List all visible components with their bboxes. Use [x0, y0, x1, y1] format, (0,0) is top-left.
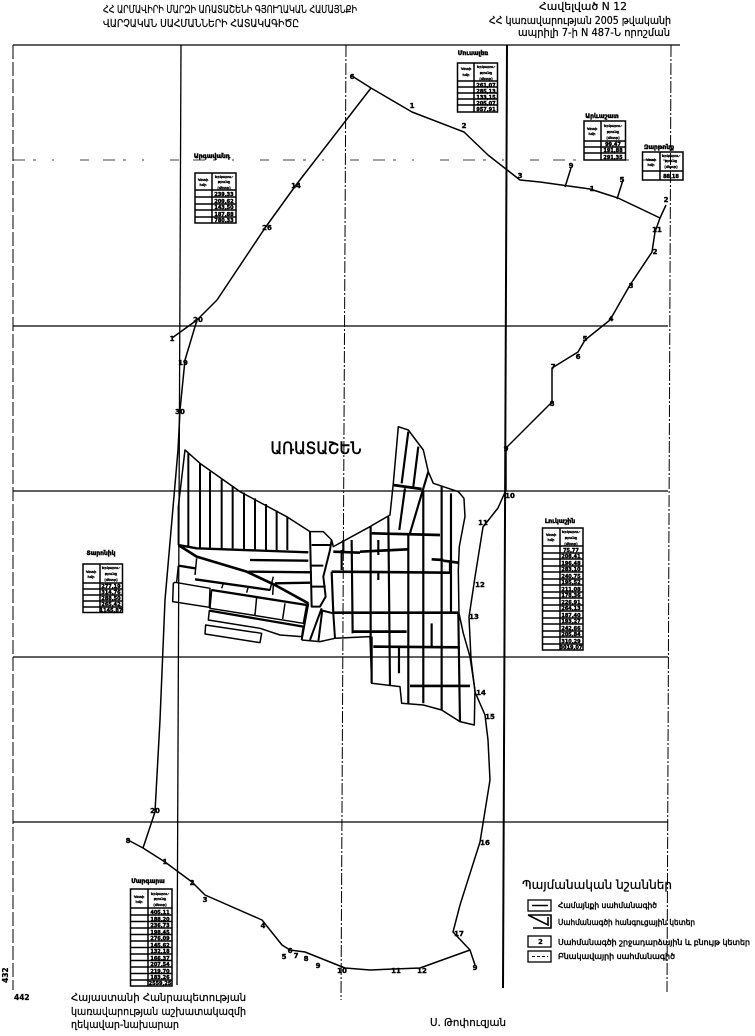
- table: east: 226,91: [561, 600, 581, 606]
- table: north east: Երկարու-: [604, 124, 623, 128]
- table: west: հմր: [88, 575, 95, 579]
- table: west: [83, 550, 123, 614]
- table: east: (մետր): [564, 542, 578, 546]
- settlement plan: [173, 427, 475, 725]
- table: north: 205,07: [476, 101, 496, 107]
- table: far north east: Երկարու-: [662, 154, 681, 158]
- table: east: Լուկաշին: [545, 518, 575, 525]
- minister signature block: կառավարության աշխատակազմի: [71, 1006, 246, 1018]
- table: west: 288,50: [101, 596, 121, 602]
- table: east: 205,84: [561, 632, 581, 638]
- legend title: Պայմանական նշաններ: [522, 877, 672, 892]
- boundary point labels: 1: [410, 102, 415, 110]
- table: east: 178,36: [561, 593, 581, 599]
- table: north west: 187,88: [214, 212, 234, 218]
- table: south west: 405,11: [150, 910, 170, 916]
- boundary point labels: 1: [170, 335, 175, 343]
- table: north west: (մետր): [217, 186, 231, 190]
- table: east: 193,27: [561, 619, 581, 625]
- boundary point labels: 13: [469, 613, 479, 621]
- table: south west: թյունը: [154, 897, 167, 901]
- table: west: 314,76: [101, 590, 121, 596]
- table: north east: [584, 113, 626, 161]
- boundary point labels: 6: [288, 947, 293, 955]
- table: west: (մետր): [104, 578, 118, 582]
- table: north east: Արևաշատ: [585, 113, 619, 120]
- boundary point labels: 2: [653, 248, 658, 256]
- table: far north east: (մետր): [664, 165, 678, 169]
- central blocks: [302, 532, 335, 642]
- boundary point labels: 1: [590, 185, 595, 193]
- minister signature block: ղեկավար-նախարար: [71, 1019, 179, 1031]
- boundary point labels: 12: [417, 967, 427, 975]
- boundary point labels: 4: [261, 922, 266, 930]
- annex note: Հավելված N 12: [539, 1, 627, 13]
- settlement outline: [178, 427, 475, 725]
- table: east: 196,48: [561, 561, 581, 567]
- table: north: 133,15: [476, 95, 496, 101]
- table: north east: հմր: [589, 132, 596, 136]
- boundary point labels: 14: [476, 689, 486, 697]
- table: east: 310,29: [561, 639, 581, 645]
- boundary point labels: 26: [262, 224, 272, 232]
- table: north: հմր: [463, 73, 470, 77]
- table: east: 283,10: [561, 567, 581, 573]
- table: north east: 99,47: [605, 142, 621, 148]
- boundary point labels: 9: [316, 962, 321, 970]
- table: east: 75,77: [563, 548, 579, 554]
- boundary point labels: 3: [518, 172, 523, 180]
- table: north: 957,91: [476, 107, 496, 113]
- table: west: 277,19: [101, 584, 121, 590]
- boundary point labels: 5: [620, 176, 625, 184]
- table: north west: 780,33: [214, 218, 234, 224]
- boundary point labels: 15: [485, 713, 495, 721]
- table: north: [457, 50, 498, 113]
- table: east: Կետի: [546, 533, 557, 537]
- table: east: 3019,07: [560, 645, 583, 651]
- boundary point labels: 2: [190, 879, 195, 887]
- table: north east: Կետի: [587, 127, 598, 131]
- table: south west: 198,45: [150, 930, 170, 936]
- table: north west: 143,50: [214, 205, 234, 211]
- table: south west: հմր: [136, 900, 143, 904]
- boundary point labels: 9: [569, 162, 574, 170]
- table: east: [542, 518, 583, 651]
- community boundary line: [128, 76, 666, 970]
- boundary point labels: 7: [551, 363, 556, 371]
- table: north west: [194, 153, 236, 224]
- table: south west: (մետր): [153, 903, 167, 907]
- boundary point labels: 20: [193, 316, 203, 324]
- table: north: Երկարու-: [477, 65, 496, 69]
- table: south west: 145,62: [150, 943, 170, 949]
- table: far north east: 88,18: [663, 174, 679, 180]
- table: east: 242,66: [561, 626, 581, 632]
- table: north: 285,13: [476, 89, 496, 95]
- table: north west: թյունը: [218, 180, 231, 184]
- boundary point labels: 8: [550, 400, 555, 408]
- table: east: հմր: [548, 538, 555, 542]
- table: south west: 132,18: [150, 949, 170, 955]
- table: west: Կետի: [86, 570, 97, 574]
- table: far north east: [642, 144, 683, 180]
- boundary point labels: 14: [291, 182, 301, 190]
- boundary point labels: 7: [294, 952, 299, 960]
- table: north: (մետր): [479, 77, 493, 81]
- annex note: ապրիլի 7-ի N 487-Ն որոշման: [518, 27, 670, 39]
- boundary point labels: 11: [391, 967, 401, 975]
- legend item: boundary node: [528, 915, 695, 928]
- table: south west: 236,73: [150, 923, 170, 929]
- settlement name: ԱՌԱՏԱՇԵՆ: [270, 439, 362, 458]
- table: south west: 183,26: [150, 975, 170, 981]
- boundary point labels: 19: [178, 359, 188, 367]
- table: south west: Կետի: [134, 895, 145, 899]
- legend item: boundary turning point: [528, 936, 750, 947]
- coordinate labels: [1, 967, 30, 1002]
- legend item: community boundary: Համայնքի սահմանագիծ: [558, 901, 657, 910]
- coordinate labels: 432: [1, 967, 10, 983]
- annex note: ՀՀ կառավարության 2005 թվականի: [489, 15, 671, 27]
- table: south west: Երկարու-: [151, 892, 170, 896]
- eastern street grid: [332, 485, 470, 686]
- boundary point labels: 9: [473, 964, 478, 972]
- legend item: community boundary: [528, 900, 657, 911]
- annex note: [489, 1, 671, 39]
- table: south west: 276,09: [150, 936, 170, 942]
- table: far north east: Զարթոնք: [644, 144, 674, 151]
- table: far north east: հմր: [648, 163, 655, 167]
- boundary point labels: 17: [454, 930, 464, 938]
- boundary point labels: 2: [664, 196, 669, 204]
- table: north east: 191,88: [603, 148, 623, 154]
- table: north: 261,07: [476, 83, 496, 89]
- boundary point labels: 3: [203, 896, 208, 904]
- title: ՎԱՐՉԱԿԱՆ ՍԱՀՄԱՆՆԵՐԻ ՀԱՏԱԿԱԳԻԾԸ: [103, 18, 299, 30]
- boundary point labels: 8: [304, 955, 309, 963]
- table: east: 208,41: [561, 554, 581, 560]
- minister signature block: [71, 992, 246, 1031]
- title: [103, 4, 357, 30]
- table: south west: Մարգարա: [131, 878, 165, 885]
- boundary point labels: [126, 73, 669, 975]
- table: east: 240,75: [561, 574, 581, 580]
- western blocks: [173, 558, 307, 643]
- table: north west: հմր: [200, 183, 207, 187]
- table: north east: (մետր): [606, 136, 620, 140]
- table: east: 211,08: [561, 587, 581, 593]
- table: west: 265,42: [101, 602, 121, 608]
- table: south west: 219,70: [150, 969, 170, 975]
- table: north west: 239,33: [214, 192, 234, 198]
- table: north east: թյունը: [607, 130, 620, 134]
- boundary point labels: 20: [150, 807, 160, 815]
- boundary point labels: 5: [583, 335, 588, 343]
- table: far north east: թյունը: [665, 159, 678, 163]
- legend item: boundary node: Սահմանագծի հանգուցային կետեր: [558, 918, 695, 927]
- boundary point labels: 12: [475, 581, 485, 589]
- boundary point labels: 6: [576, 353, 581, 361]
- table: west: Երկարու-: [102, 566, 121, 570]
- table: south west: 207,54: [150, 962, 170, 968]
- table: west: Տարոնիկ: [86, 550, 116, 557]
- boundary point labels: 4: [609, 315, 614, 323]
- table: east: 264,13: [561, 606, 581, 612]
- boundary point labels: 5: [282, 953, 287, 961]
- coordinate labels: 442: [14, 993, 30, 1002]
- table: north: Մուսալեռ: [458, 50, 488, 57]
- table: north west: Արգավանդ: [194, 153, 231, 160]
- boundary point labels: 10: [505, 492, 515, 500]
- table: north: թյունը: [480, 71, 493, 75]
- boundary point labels: 6: [350, 73, 355, 81]
- boundary point labels: 30: [175, 408, 185, 416]
- table: east: Երկարու-: [562, 530, 581, 534]
- table: west: 1145,87: [100, 608, 123, 614]
- table: north east: 291,35: [603, 155, 623, 161]
- legend item: boundary turning point: Սահմանագծի շրջադարձային և բնույթ կետեր: [558, 938, 750, 947]
- boundary point labels: 2: [462, 122, 467, 130]
- signatory name: Ս. Թոփուզյան: [430, 1017, 506, 1029]
- legend: [522, 877, 750, 962]
- boundary point labels: 3: [629, 282, 634, 290]
- boundary point labels: 9: [504, 445, 509, 453]
- boundary point labels: 8: [126, 837, 131, 845]
- table: north: Կետի: [461, 67, 472, 71]
- boundary point labels: 16: [480, 839, 490, 847]
- boundary point labels: 1: [163, 858, 168, 866]
- table: far north east: Կետի: [646, 158, 657, 162]
- boundary point labels: 10: [337, 967, 347, 975]
- table: south west: 166,37: [150, 956, 170, 962]
- title: ՀՀ ԱՐՄԱՎԻՐԻ ՄԱՐԶԻ ԱՌԱՏԱՇԵՆԻ ԳՅՈՒՂԱԿԱՆ ՀԱՄԱՅՆՔԻ: [103, 4, 357, 16]
- table: east: թյունը: [565, 536, 578, 540]
- boundary point labels: 11: [478, 519, 488, 527]
- table: north west: Երկարու-: [215, 175, 234, 179]
- minister signature block: Հայաստանի Հանրապետության: [71, 992, 246, 1004]
- table: east: 187,40: [561, 613, 581, 619]
- table: north west: Կետի: [198, 178, 209, 182]
- table: north west: 209,62: [214, 199, 234, 205]
- table: south west: 2559,25: [149, 981, 172, 987]
- legend item: boundary turning point: 2: [538, 938, 543, 946]
- table: south west: 188,20: [150, 917, 170, 923]
- legend item: settlement boundary: Բնակավայրի սահմանագիծ: [558, 952, 675, 961]
- table: east: 195,52: [561, 580, 581, 586]
- boundary point labels: 11: [652, 226, 662, 234]
- table: south west: [130, 878, 172, 987]
- legend item: settlement boundary: [528, 951, 675, 962]
- table: west: թյունը: [105, 572, 118, 576]
